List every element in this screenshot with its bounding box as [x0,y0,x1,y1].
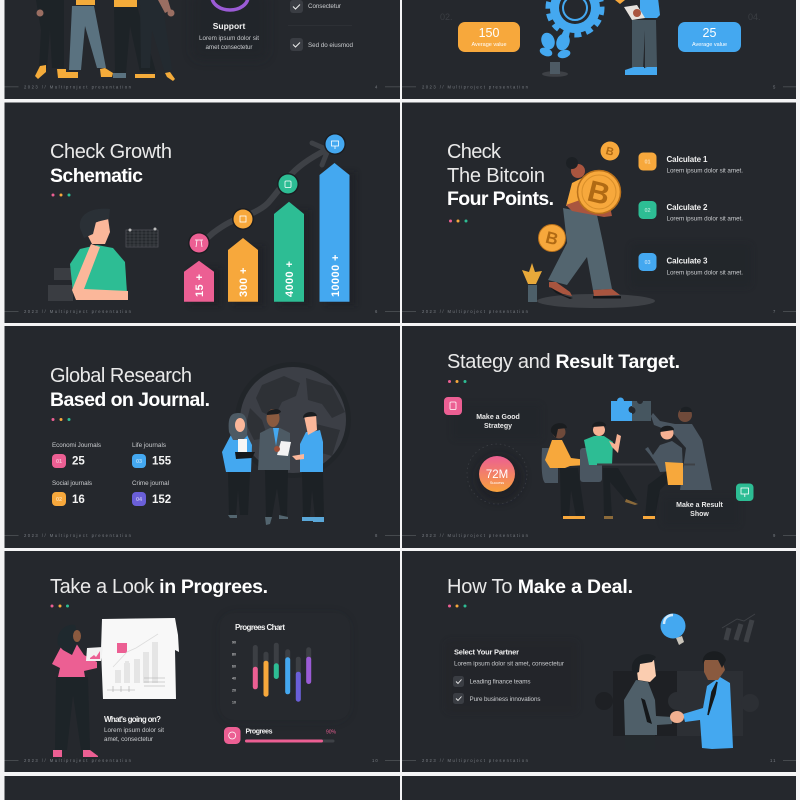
title: The Bitcoin [447,165,545,187]
stat: social journals: 02 [56,497,62,503]
stat: social journals: 16 [72,494,85,506]
text block: what's going on: amet, consectetur [104,736,153,743]
callout: make a good strategy: Strategy [484,423,512,430]
footer: 2023 // Multiproject presentation [24,758,132,763]
card: support: Lorem ipsum dolor sit [199,35,259,42]
illustration: man in grey suit [258,409,291,525]
bar: 15+ [184,261,220,306]
card: select your partner: Lorem ipsum dolor sit amet, consectetur [454,660,564,668]
icon: calendar [126,228,158,247]
illustration: handshake [670,711,684,723]
stat: crime journal: 04 [136,497,143,503]
panel: bitcoin slide [402,102,796,323]
icon: large bitcoin: B [584,175,613,212]
checklist: Sed do eiusmod [308,42,353,49]
icon: large bitcoin [578,170,620,214]
footer: 7 [773,309,776,314]
title [50,365,210,411]
footer: 5 [773,84,776,90]
icon: blue circle [324,133,346,155]
point: calculate 1: 01 [644,160,651,166]
accent dots [448,380,466,383]
chart: progrees chart: 90 [232,640,236,644]
footer [402,84,796,90]
illustration: standing person [615,0,660,75]
point: calculate 1: Lorem ipsum dolor sit amet. [666,168,743,174]
text block: what's going on: What's going on? [104,715,161,724]
stat: social journals: Social journals [52,480,92,487]
arrow: growth path [205,143,328,240]
label: 02: 02. [440,12,453,22]
icon: medium bitcoin [538,224,566,252]
card: select your partner [445,640,578,713]
illustration: woman in yellow [542,423,587,519]
footer: 6 [375,309,378,314]
card: select your partner: Pure business innovations [470,696,540,703]
bar: 300+: 300 + [238,267,250,297]
footer [402,758,796,763]
footer: 2023 // Multiproject presentation [24,84,132,90]
title: Check [447,141,502,163]
icon: light bulb [660,614,686,645]
title [447,141,554,210]
point: calculate 2: Lorem ipsum dolor sit amet. [666,216,743,222]
stat: economic journals: Economi Journals [52,442,101,449]
footer: 10 [372,758,379,763]
footer: 2023 // Multiproject presentation [422,533,529,538]
icon: puzzle [611,398,651,421]
text block: what's going on [104,715,164,743]
chart: progrees chart: 20 [232,688,236,692]
panel: empty slide bottom right [402,776,796,800]
callout: make a good strategy [444,397,542,440]
card: value 150: 150 [479,26,499,40]
accent dots [449,220,468,222]
chart: progrees chart: 80 [232,652,236,656]
footer [4,309,400,314]
illustration: group of four people [35,0,175,81]
chart: progrees chart [220,613,350,720]
footer [402,309,796,314]
illustration: man in grey [643,426,683,519]
stat: economic journals [52,442,101,468]
illustration: man in blue jacket [292,412,324,522]
card highlight [630,243,752,288]
title: How To Make a Deal. [447,576,633,598]
card: select your partner: Leading finance teams [470,678,530,686]
icon: chart decoration [722,614,755,642]
stat: life journals: 03 [136,459,142,465]
point: calculate 3: 03 [644,260,651,266]
stat: crime journal: Crime journal [132,480,169,487]
icon: gear [548,0,602,35]
illustration: presentation board [101,618,179,699]
metric: 72M success [467,444,527,504]
accent dots [52,418,70,421]
title: Take a Look in Progrees. [50,576,268,598]
icon: green circle [277,173,299,195]
title: Four Points. [447,188,554,210]
icon: small bitcoin top: B [604,145,615,159]
footer: 2023 // Multiproject presentation [422,309,529,314]
footer: 2023 // Multiproject presentation [422,758,529,763]
title: Based on Journal. [50,389,210,411]
metric: 72M success: 72M [486,469,508,481]
checklist: Consectetur [308,3,341,10]
stat: crime journal [132,480,171,506]
chart: progrees chart: Progrees Chart [235,623,285,632]
card: value 25: Average value [692,42,727,48]
panel: team slide top left [4,0,400,99]
bar: 10000+ [320,163,356,306]
accent dots [52,194,70,196]
point: calculate 3: Lorem ipsum dolor sit amet. [666,270,743,276]
card: value 25 [678,22,741,52]
panel: make a deal slide [402,551,796,772]
title: Check Growth [50,141,172,163]
icon: small bitcoin top [600,142,620,160]
panel: empty slide bottom left [4,776,400,800]
chart: progrees chart: 10 [232,700,236,704]
footer: 2023 // Multiproject presentation [24,533,132,538]
panel: strategy slide [402,326,796,548]
illustration: man in grey sweater [624,654,672,750]
callout: make a result show: Show [690,511,709,518]
illustration: standing woman [651,407,712,490]
stat: social journals [52,480,92,506]
callout: make a result show: Make a Result [676,502,724,509]
footer [4,533,400,538]
icon: puzzle background [595,671,759,736]
stat: life journals: 155 [152,456,172,468]
bar: 4000+: 4000 + [284,261,296,297]
illustration: thinking man [48,209,128,301]
card: support: Support [213,21,245,31]
card: value 25: 25 [703,26,716,40]
illustration: person with bitcoin [548,157,621,299]
callout: make a result show [662,484,754,526]
footer [4,758,400,763]
title: Schematic [50,165,143,187]
point: calculate 1 [638,152,743,174]
accent dots [448,604,466,608]
panel: global research slide [4,326,400,548]
table [597,464,695,466]
card: value 150 [458,22,520,52]
bar: 10000+: 10000 + [330,254,342,297]
illustration: plant [539,31,572,77]
title: Stategy and Result Target. [447,351,680,373]
metric: 72M success: Success [490,481,504,485]
accent dots [50,604,69,608]
chart: progrees chart: 40 [232,676,236,680]
panel: growth schematic slide [4,102,400,323]
footer: 4 [375,84,378,90]
card: select your partner: Select Your Partner [454,648,519,656]
card: support: amet consectetur [206,44,252,51]
footer: 9 [773,533,776,538]
point: calculate 2 [638,201,743,222]
icon: medium bitcoin: B [544,228,560,249]
point: calculate 2: Calculate 2 [666,203,708,212]
text block: what's going on: Lorem ipsum dolor sit [104,727,164,734]
bar: 15+: 15 + [194,274,206,297]
footer: 2023 // Multiproject presentation [24,309,132,314]
card: value 150: Average value [471,42,507,48]
title: Global Research [50,365,192,387]
shadow: ground [537,294,655,308]
panel: average values slide top right [402,0,796,99]
illustration: man in green [580,422,638,519]
point: calculate 3: Calculate 3 [666,256,708,266]
checklist [288,0,353,51]
illustration: globe [235,362,351,478]
label: 04: 04. [748,12,761,22]
progress bar: 90% [326,730,337,736]
progress bar [224,727,337,744]
footer: 11 [770,758,777,763]
stat: economic journals: 01 [56,459,62,465]
panel: progress slide [4,551,400,772]
icon: plant [522,263,542,302]
card: support [192,0,268,60]
footer: 2023 // Multiproject presentation [422,84,529,90]
icon: pink circle [188,232,210,254]
point: calculate 2: 02 [644,208,651,214]
point: calculate 3 [638,253,743,276]
point: calculate 1: Calculate 1 [666,155,708,164]
illustration: woman presenting [52,625,103,757]
stat: crime journal: 152 [152,494,171,506]
progress bar: Progrees [246,728,273,736]
stat: economic journals: 25 [72,456,85,468]
illustration: man in blue suit [683,651,733,749]
stat: life journals [132,442,172,468]
chart: progrees chart: 60 [232,664,236,668]
title [50,141,172,187]
bar: 4000+ [274,202,310,306]
bar: 300+ [228,238,264,306]
icon: orange circle [232,208,254,230]
footer [402,533,796,538]
footer [4,84,400,90]
illustration: woman in hijab [222,413,255,518]
footer: 8 [375,533,378,538]
stat: life journals: Life journals [132,442,166,449]
callout: make a good strategy: Make a Good [476,414,520,421]
